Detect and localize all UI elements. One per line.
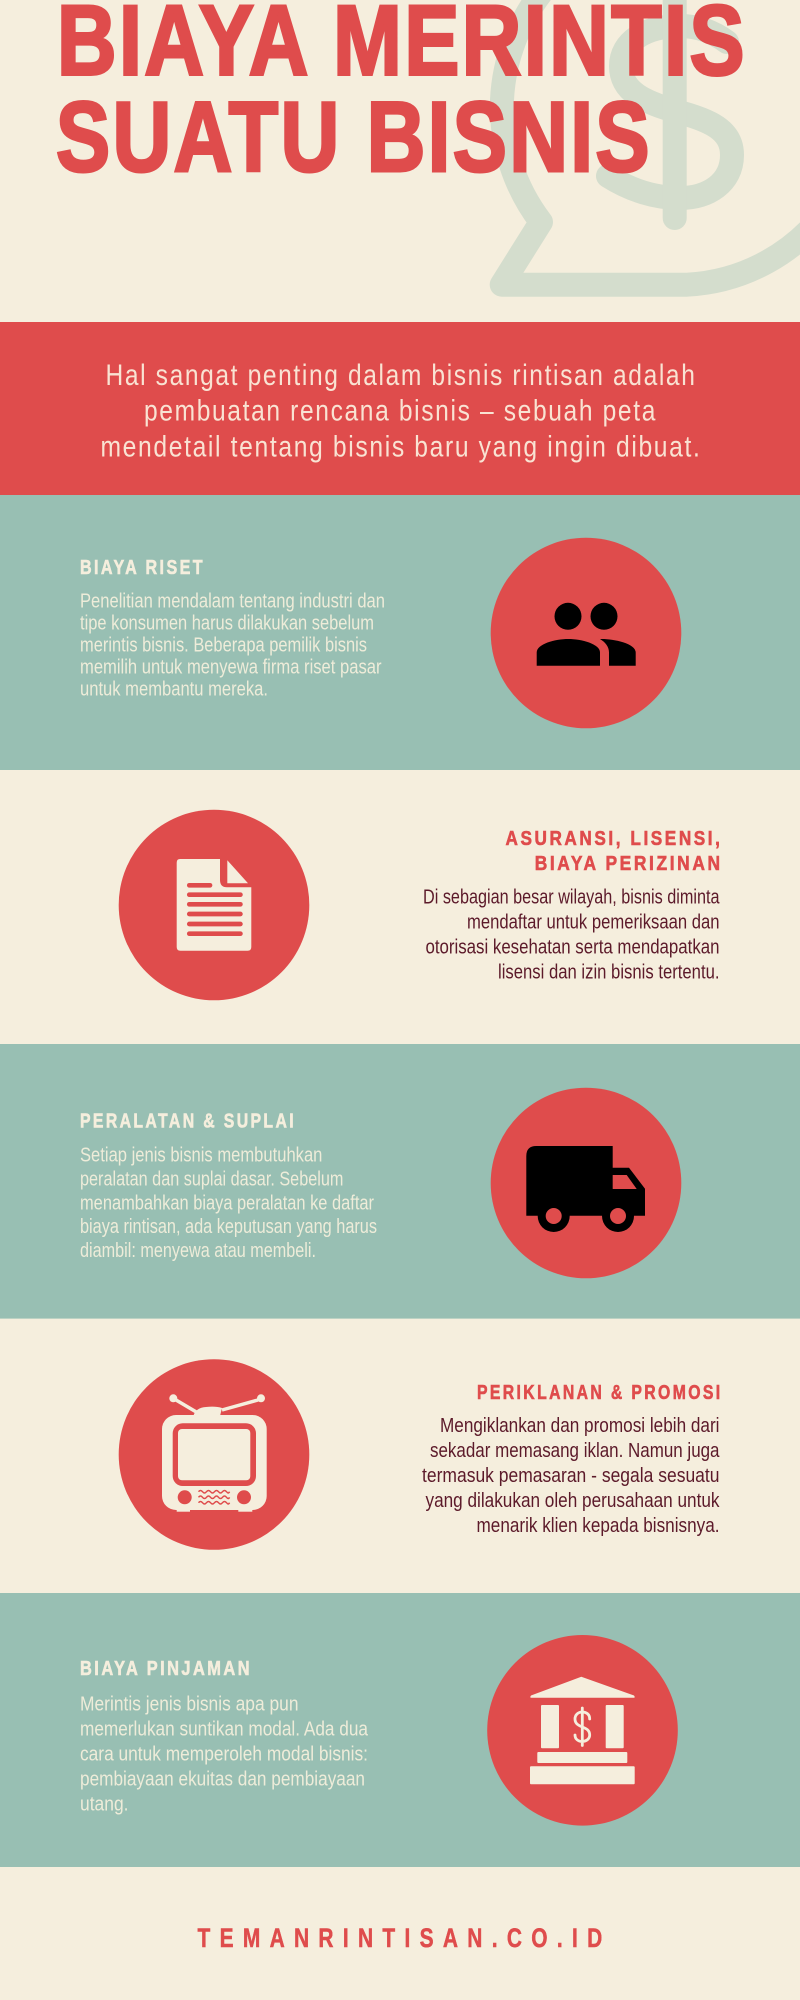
text: peralatan (80, 1144, 377, 1262)
text: peralatan: peralatan dan suplai dasar. Sebelum (80, 1168, 343, 1190)
text: periklanan: sekadar memasang iklan. Namun juga (430, 1440, 720, 1462)
intro text: pembuatan rencana bisnis – sebuah peta (144, 395, 657, 428)
footer website: TEMANRINTISAN.CO.ID (198, 1923, 612, 1953)
panel: asuransi, lisensi, biaya perizinan (119, 810, 723, 1000)
icon: truck in circle (491, 1088, 681, 1278)
panel: biaya riset (0, 495, 800, 770)
title (56, 0, 747, 192)
text: biaya pinjaman: utang. (80, 1794, 128, 1816)
text: biaya riset: untuk membantu mereka. (80, 678, 268, 700)
panel: biaya pinjaman (0, 1593, 800, 1867)
panel: peralatan & suplai (0, 1044, 800, 1319)
text: biaya pinjaman (80, 1694, 369, 1816)
heading: asuransi, lisensi, biaya perizinan: BIAYA PERIZINAN (535, 853, 723, 875)
text: peralatan: biaya rintisan, ada keputusan yang harus (80, 1216, 377, 1238)
text: periklanan (422, 1415, 720, 1537)
icon: television in circle (119, 1359, 309, 1550)
intro text (100, 359, 702, 464)
text: periklanan: Mengiklankan dan promosi lebih dari (440, 1415, 720, 1437)
heading: asuransi, lisensi, biaya perizinan: ASURANSI, LISENSI, (506, 828, 722, 850)
text: asuransi: mendaftar untuk pemeriksaan dan (467, 912, 720, 934)
text: peralatan: diambil: menyewa atau membeli. (80, 1240, 316, 1262)
heading: periklanan & promosi: PERIKLANAN & PROMOSI (477, 1382, 722, 1404)
text: biaya riset (80, 590, 385, 700)
text: biaya riset: memilih untuk menyewa firma riset pasar (80, 656, 382, 678)
text: asuransi: lisensi dan izin bisnis tertentu. (498, 961, 720, 983)
text: asuransi: otorisasi kesehatan serta mendapatkan (426, 936, 720, 958)
text: biaya riset: merintis bisnis. Beberapa pemilik bisnis (80, 634, 367, 656)
text: biaya pinjaman: Merintis jenis bisnis apa pun (80, 1694, 298, 1716)
heading: biaya pinjaman: BIAYA PINJAMAN (80, 1658, 252, 1680)
icon: bank in circle (487, 1635, 678, 1826)
background icon: dollar speech bubble (502, 0, 800, 285)
title: SUATU BISNIS (56, 81, 652, 192)
text: biaya riset: tipe konsumen harus dilakukan sebelum (80, 612, 374, 634)
panel: periklanan & promosi (119, 1359, 722, 1550)
text: asuransi: Di sebagian besar wilayah, bisnis diminta (423, 887, 720, 909)
text: peralatan: menambahkan biaya peralatan ke daftar (80, 1192, 374, 1214)
text: biaya pinjaman: pembiayaan ekuitas dan pembiayaan (80, 1769, 365, 1791)
text: biaya riset: Penelitian mendalam tentang industri dan (80, 590, 385, 612)
text: periklanan: yang dilakukan oleh perusahaan untuk (426, 1490, 720, 1512)
text: periklanan: menarik klien kepada bisnisnya. (476, 1515, 720, 1537)
heading: asuransi, lisensi, biaya perizinan (506, 828, 723, 875)
text: biaya pinjaman: cara untuk memperoleh modal bisnis: (80, 1744, 368, 1766)
text: asuransi (423, 887, 720, 983)
heading: peralatan & suplai: PERALATAN & SUPLAI (80, 1110, 296, 1132)
icon: people in circle (491, 538, 681, 728)
icon: document in circle (119, 810, 309, 1000)
text: peralatan: Setiap jenis bisnis membutuhkan (80, 1144, 322, 1166)
text: biaya pinjaman: memerlukan suntikan modal. Ada dua (80, 1719, 369, 1741)
panel: intro banner (0, 322, 800, 495)
text: periklanan: termasuk pemasaran - segala sesuatu (422, 1465, 720, 1487)
heading: biaya riset: BIAYA RISET (80, 557, 205, 579)
